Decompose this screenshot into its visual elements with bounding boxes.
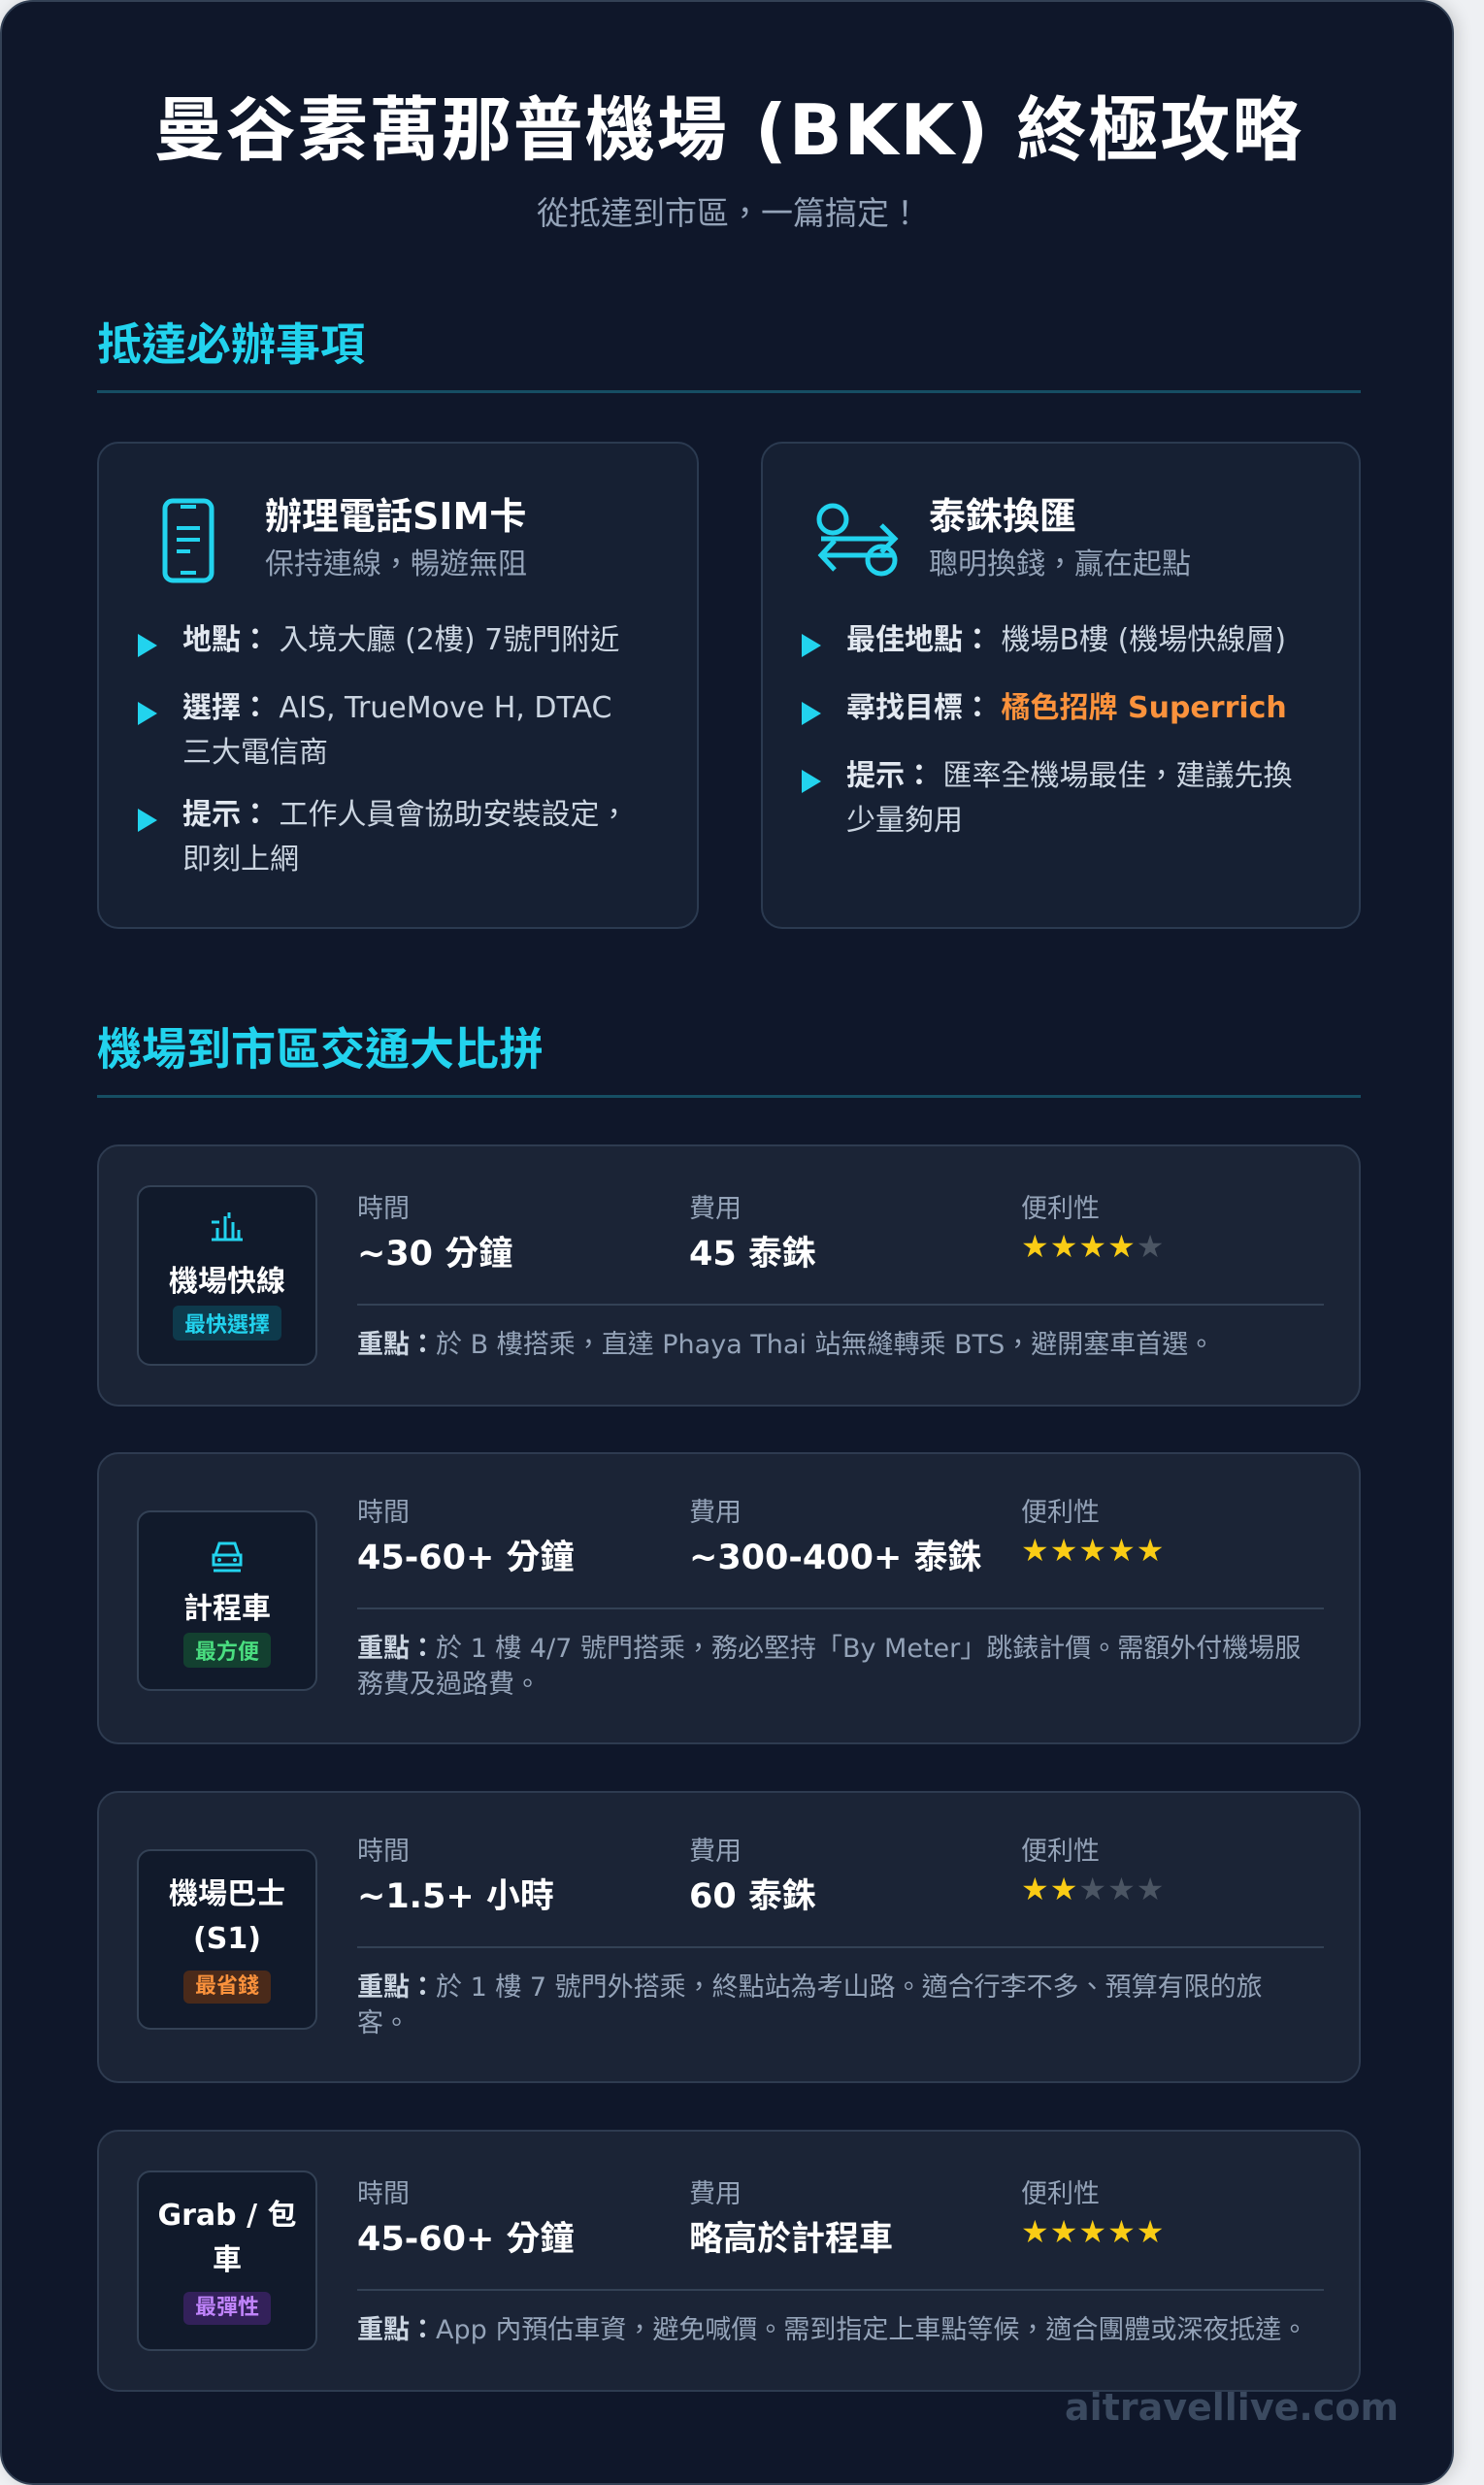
panel: airport rail link: ★★★★★ (1021, 1228, 1165, 1265)
panel: taxi: 45-60+ 分鐘 (357, 1539, 574, 1577)
label box: 車 (213, 2243, 242, 2277)
note: 重點：於 1 樓 4/7 號門搭乘，務必堅持「By Meter」跳錶計價。需額外付機場服務費及過路費。 (357, 1634, 1301, 1700)
stats: 時間 (357, 1194, 410, 1224)
card title: 辦理電話SIM卡 (265, 495, 526, 538)
stats: 時間 (357, 1498, 410, 1528)
panel: airport bus: ★★★★★ (1021, 1871, 1165, 1907)
bullet: choice: 選擇： AIS, TrueMove H, DTAC 三大電信商 (182, 691, 611, 770)
subtitle: 從抵達到市區，一篇搞定！ (537, 194, 921, 232)
title: 曼谷素萬那普機場 (BKK) 終極攻略 (154, 89, 1303, 171)
stats: 時間 (357, 1837, 410, 1867)
bullet: best place: 最佳地點： 機場B樓 (機場快線層) (846, 623, 1286, 657)
panel: currency exchange (761, 442, 1361, 929)
icon: phone (163, 499, 214, 582)
panel: Grab: 45-60+ 分鐘 (357, 2220, 574, 2259)
icon: train (212, 1212, 243, 1241)
heading: arrival: 抵達必辦事項 (97, 318, 365, 371)
stats: 時間 (357, 2179, 410, 2209)
panel: Grab: 便利性 (1021, 2179, 1100, 2209)
watermark: aitravellive.com (1065, 2386, 1399, 2429)
panel: Grab: ★★★★★ (1021, 2213, 1165, 2250)
panel: airport bus: 便利性 (1021, 1837, 1100, 1867)
panel: taxi: ★★★★★ (1021, 1532, 1165, 1569)
label box: 機場巴士 (169, 1877, 285, 1911)
note: 重點：於 B 樓搭乘，直達 Phaya Thai 站無縫轉乘 BTS，避開塞車首選。 (357, 1330, 1214, 1360)
card subtitle: 保持連線，暢遊無阻 (265, 547, 527, 581)
panel: Grab: 略高於計程車 (689, 2220, 893, 2259)
label box: 最彈性 (195, 2296, 259, 2320)
panel: airport bus: 60 泰銖 (689, 1877, 816, 1916)
label box: (S1) (193, 1922, 261, 1956)
card subtitle: 聰明換錢，贏在起點 (929, 547, 1191, 581)
panel: airport rail link: 便利性 (1021, 1194, 1100, 1224)
bullet: location: 地點： 入境大廳 (2樓) 7號門附近 (182, 623, 619, 657)
bullet: tip: 提示： 工作人員會協助安裝設定，即刻上網 (182, 798, 629, 877)
panel: airport bus: 費用 (689, 1837, 742, 1867)
note: 重點：App 內預估車資，避免喊價。需到指定上車點等候，適合團體或深夜抵達。 (357, 2315, 1307, 2345)
panel: taxi (97, 1452, 1361, 1744)
heading: transport: 機場到市區交通大比拼 (97, 1023, 544, 1076)
icon: exchange (817, 503, 899, 577)
label box: 機場快線 (169, 1265, 285, 1299)
bullet: target: 尋找目標： 橘色招牌 Superrich (846, 691, 1287, 725)
note: 重點：於 1 樓 7 號門外搭乘，終點站為考山路。適合行李不多、預算有限的旅客。 (357, 1972, 1263, 2038)
label box (137, 2170, 317, 2351)
panel: taxi: 便利性 (1021, 1498, 1100, 1528)
panel: airport rail link: 45 泰銖 (689, 1235, 816, 1274)
label box: 最快選擇 (184, 1313, 270, 1338)
panel: Grab: 費用 (689, 2179, 742, 2209)
panel: airport rail link: ~30 分鐘 (357, 1235, 512, 1274)
label box: Grab / 包 (157, 2199, 296, 2233)
icon: car (212, 1541, 243, 1573)
bullet: tip: 提示： 匯率全機場最佳，建議先換少量夠用 (846, 759, 1293, 838)
panel: airport rail link: 費用 (689, 1194, 742, 1224)
panel: airport rail link (97, 1144, 1361, 1407)
label box (137, 1849, 317, 2030)
panel: airport bus: ~1.5+ 小時 (357, 1877, 554, 1916)
label box: 最方便 (195, 1640, 259, 1665)
card title: 泰銖換匯 (929, 495, 1076, 538)
panel: Grab (97, 2130, 1361, 2392)
panel: taxi: 費用 (689, 1498, 742, 1528)
label box: 計程車 (183, 1592, 271, 1626)
label box (137, 1510, 317, 1691)
panel: SIM card (97, 442, 699, 929)
label box: 最省錢 (195, 1974, 259, 1999)
panel: taxi: ~300-400+ 泰銖 (689, 1539, 981, 1577)
panel: airport bus (97, 1791, 1361, 2083)
label box (137, 1185, 317, 1366)
